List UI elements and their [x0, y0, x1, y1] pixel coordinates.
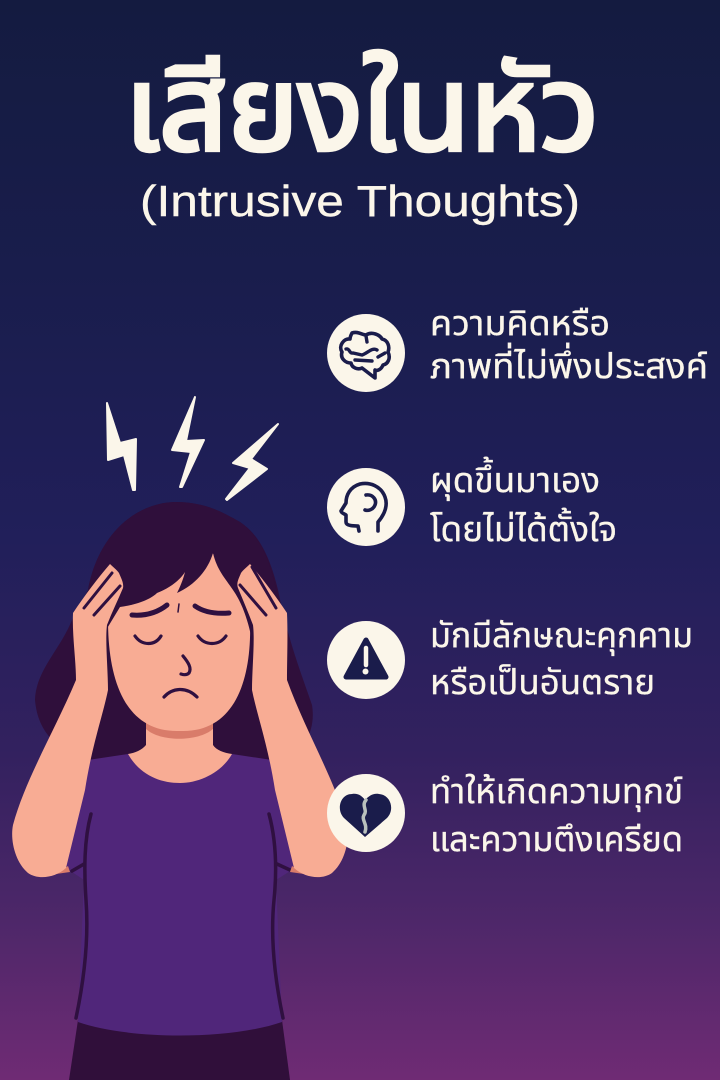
- left arm and hand: [12, 564, 123, 877]
- right elbow shadow: [290, 866, 304, 874]
- item 3: threatening: [327, 616, 693, 702]
- text: หรือเป็นอันตราย: [430, 663, 655, 702]
- finger lines: [84, 567, 276, 615]
- icon: broken heart: [327, 774, 405, 852]
- item 1: unwanted thoughts: [327, 304, 708, 392]
- shirt: [66, 754, 295, 1036]
- text: มักมีลักษณะคุกคาม: [430, 616, 693, 656]
- neck shadow: [146, 722, 213, 739]
- text: และความตึงเครียด: [430, 820, 683, 859]
- back hair: [35, 502, 313, 764]
- icon: head with question: [327, 468, 405, 546]
- subtitle: (Intrusive Thoughts): [140, 177, 580, 226]
- text: ทำให้เกิดความทุกข์: [430, 772, 683, 812]
- shirt side folds: [72, 814, 290, 1018]
- right arm and hand: [237, 564, 348, 877]
- text: ภาพที่ไม่พึ่งประสงค์: [430, 342, 708, 386]
- title: เสียงในหัว: [125, 44, 599, 176]
- text: ผุดขึ้นมาเอง: [430, 456, 600, 501]
- neck: [128, 715, 232, 783]
- icon: lightning bolts: [107, 397, 278, 500]
- text: โดยไม่ได้ตั้งใจ: [430, 507, 617, 549]
- icon: warning: [327, 621, 405, 699]
- text: ความคิดหรือ: [430, 304, 610, 343]
- item 2: appears on its own: [327, 456, 617, 549]
- face: [108, 545, 250, 731]
- pants: [69, 1020, 290, 1080]
- icon: brain: [327, 314, 405, 392]
- illustration: stressed woman: [12, 397, 348, 1080]
- item 4: distress: [327, 772, 683, 859]
- left elbow shadow: [56, 866, 70, 874]
- fringe: [88, 502, 278, 640]
- face features: [132, 604, 229, 697]
